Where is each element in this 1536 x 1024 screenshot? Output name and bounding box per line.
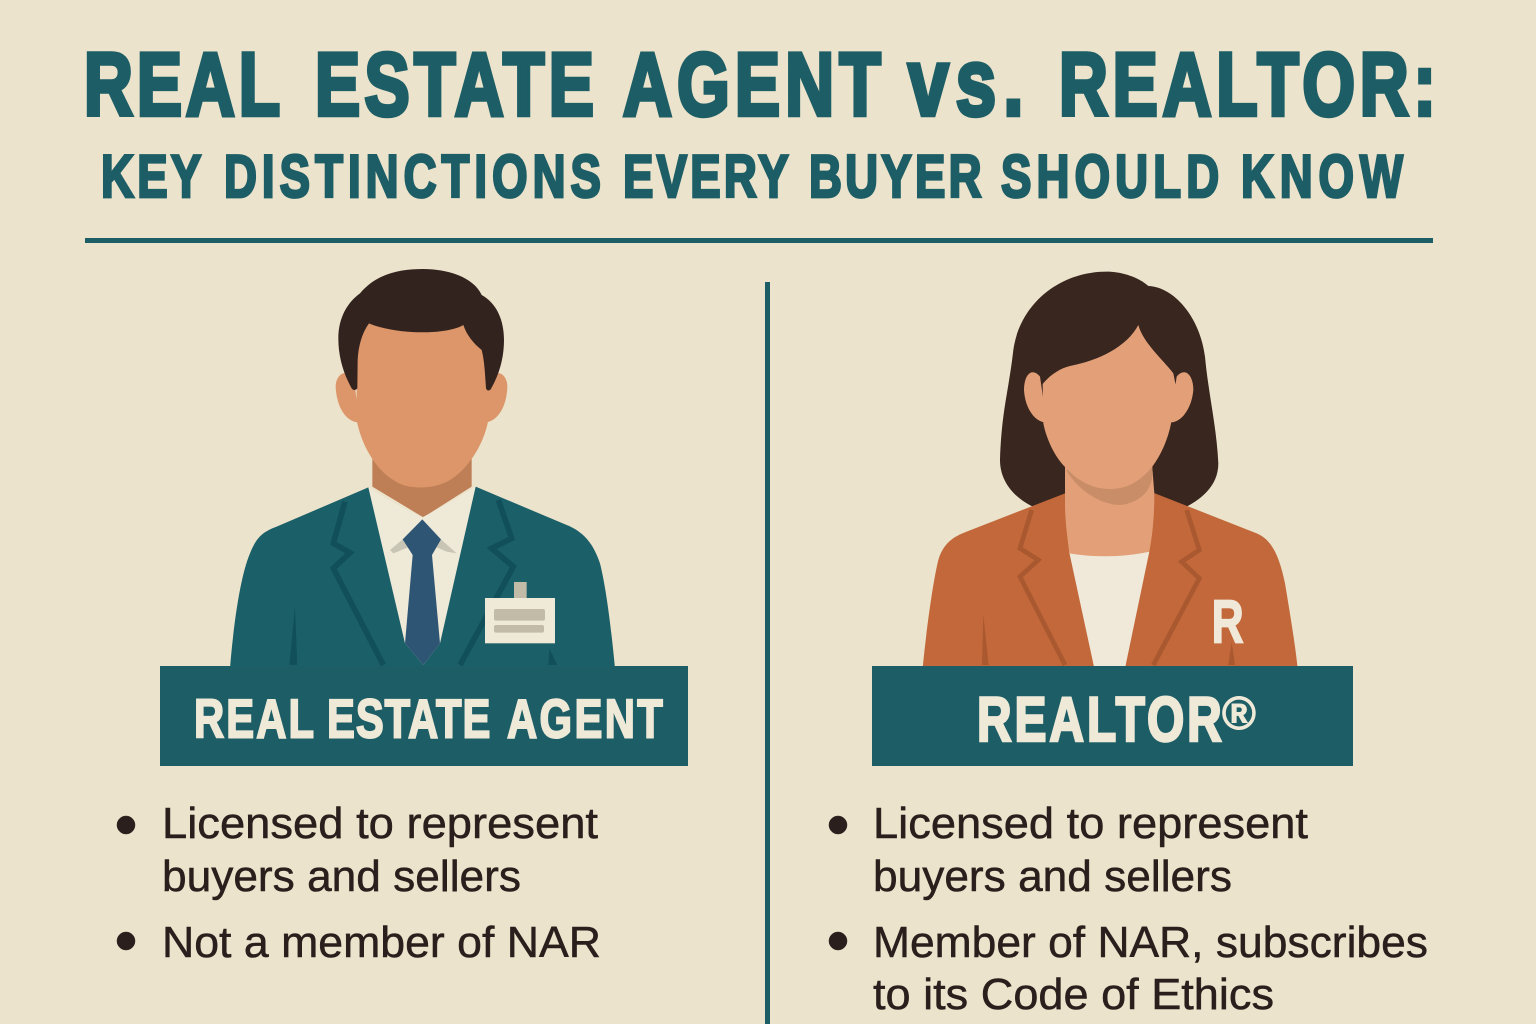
subtitle: SHOULD xyxy=(1001,144,1219,210)
subtitle: DISTINCTIONS xyxy=(224,144,601,210)
label: real estate agent: AGENT xyxy=(507,689,663,750)
subtitle: KNOW xyxy=(1241,144,1403,210)
label: real estate agent: REAL xyxy=(194,689,314,750)
bullet list: real estate agent xyxy=(117,799,601,967)
bullet list: real estate agent: Not a member of NAR xyxy=(162,918,601,967)
title: vs. xyxy=(908,29,1024,136)
subtitle: KEY xyxy=(101,144,201,210)
title xyxy=(84,29,1436,136)
subtitle: BUYER xyxy=(809,144,982,210)
bullet list: realtor: buyers and sellers xyxy=(873,852,1232,901)
subtitle: EVERY xyxy=(623,144,789,210)
bullet list: real estate agent: buyers and sellers xyxy=(162,852,521,901)
subtitle xyxy=(101,144,1403,210)
title: REALTOR: xyxy=(1059,34,1436,134)
label: real estate agent: ESTATE xyxy=(327,689,490,750)
bullet list: realtor xyxy=(829,799,1428,1019)
badge xyxy=(485,582,555,643)
bullet list: real estate agent: Licensed to represent xyxy=(162,799,598,848)
icon: real estate agent figure xyxy=(230,269,615,668)
icon: realtor figure xyxy=(923,272,1298,668)
title: ESTATE xyxy=(315,34,594,134)
label: realtor: REALTOR xyxy=(977,684,1222,755)
label: real estate agent xyxy=(160,666,688,766)
title: REAL xyxy=(84,34,280,134)
R pin: R xyxy=(1212,588,1244,656)
label: realtor: ® xyxy=(1222,687,1256,739)
bullet list: realtor: to its Code of Ethics xyxy=(873,970,1274,1019)
title: AGENT xyxy=(623,34,881,134)
label: realtor xyxy=(872,666,1353,766)
bullet list: realtor: Member of NAR, subscribes xyxy=(873,918,1428,967)
bullet list: realtor: Licensed to represent xyxy=(873,799,1308,848)
